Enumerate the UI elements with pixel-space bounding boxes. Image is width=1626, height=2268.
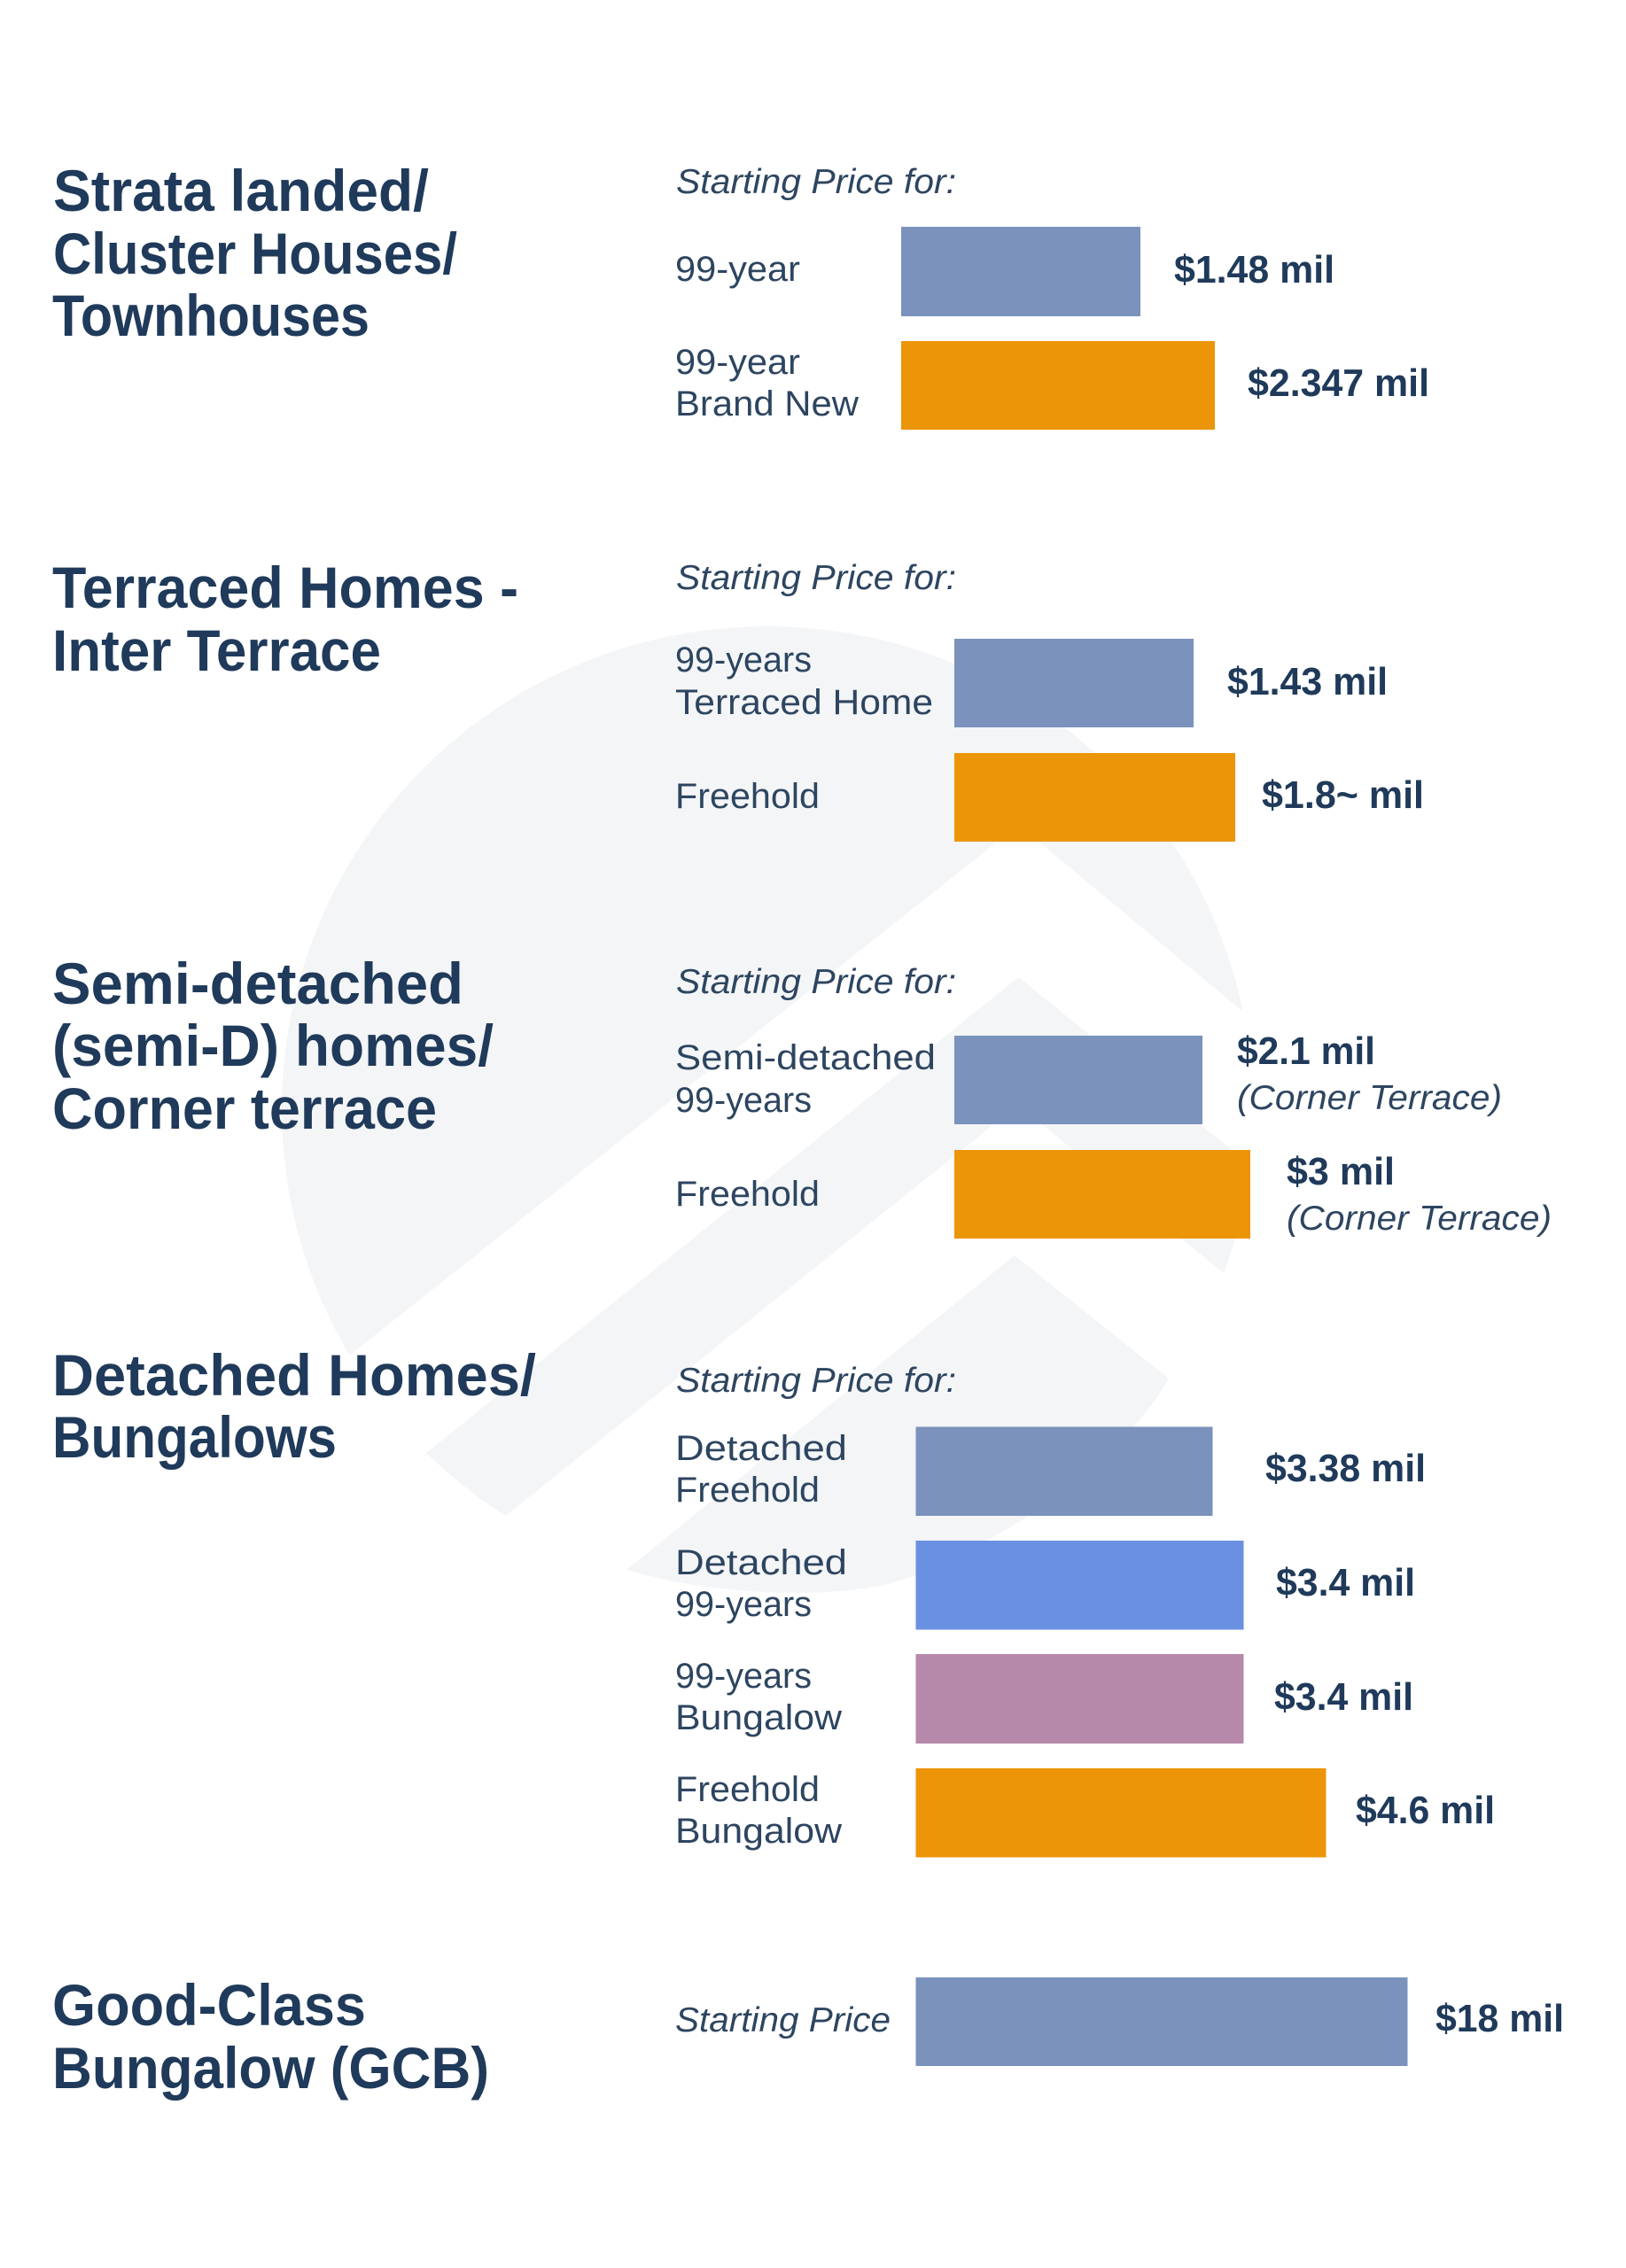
value: 1.8 mil: $1.8~ mil bbox=[1262, 773, 1424, 817]
label: freehold: Freehold bbox=[675, 1175, 820, 1214]
heading: detached homes: Bungalows bbox=[52, 1404, 337, 1470]
heading: strata landed: Strata landed/ bbox=[53, 158, 429, 223]
value: 3 mil corner terrace: $3 mil bbox=[1287, 1150, 1395, 1193]
label: freehold bungalow: Bungalow bbox=[675, 1812, 842, 1851]
bar: detached 99-years bbox=[916, 1541, 1244, 1630]
value: 3.4 mil: $3.4 mil bbox=[1276, 1561, 1415, 1604]
label: freehold: Freehold bbox=[675, 777, 820, 816]
heading: semi-detached: Corner terrace bbox=[52, 1076, 437, 1141]
value: 1.43 mil: $1.43 mil bbox=[1227, 660, 1388, 703]
value: 18 mil: $18 mil bbox=[1435, 1997, 1564, 2040]
heading: strata landed: Cluster Houses/ bbox=[53, 221, 457, 286]
label: 99-years bungalow: 99-years bbox=[675, 1657, 812, 1696]
label: 99-years bungalow: Bungalow bbox=[675, 1698, 842, 1737]
heading: terraced homes: Inter Terrace bbox=[52, 617, 381, 683]
background logo watermark bbox=[282, 626, 1242, 1593]
value: 2.1 mil corner terrace bbox=[1237, 1029, 1502, 1117]
heading: terraced homes bbox=[52, 555, 518, 683]
bar: 99-years bungalow bbox=[916, 1654, 1244, 1744]
subheading: starting price: Starting Price for: bbox=[676, 1362, 956, 1400]
heading: semi-detached: (semi-D) homes/ bbox=[52, 1013, 494, 1078]
bar: 99-year bbox=[901, 227, 1140, 316]
panel: terraced homes bbox=[52, 555, 1424, 842]
value: 3.38 mil: $3.38 mil bbox=[1265, 1447, 1426, 1490]
label: detached freehold: Freehold bbox=[675, 1471, 820, 1510]
value: 1.48 mil: $1.48 mil bbox=[1174, 248, 1334, 291]
heading: terraced homes: Terraced Homes - bbox=[52, 555, 518, 620]
subheading: starting price: Starting Price for: bbox=[676, 963, 956, 1001]
label: 99-year: 99-year bbox=[675, 250, 800, 289]
bar: detached freehold bbox=[916, 1426, 1212, 1516]
heading: semi-detached: Semi-detached bbox=[52, 951, 463, 1016]
label: 99-year brand new bbox=[675, 343, 859, 423]
label: detached freehold: Detached bbox=[675, 1429, 847, 1468]
value: 3 mil corner terrace bbox=[1287, 1150, 1552, 1238]
label: freehold bungalow bbox=[675, 1770, 842, 1851]
panel: good-class bungalow bbox=[52, 1972, 1564, 2101]
value: 3.4 mil: $3.4 mil bbox=[1274, 1675, 1413, 1719]
value: 2.347 mil: $2.347 mil bbox=[1248, 361, 1429, 405]
heading: semi-detached bbox=[52, 951, 494, 1141]
label: detached freehold bbox=[675, 1429, 847, 1510]
heading: strata landed bbox=[52, 158, 457, 348]
value: 2.1 mil corner terrace: (Corner Terrace) bbox=[1237, 1079, 1502, 1117]
value: 2.1 mil corner terrace: $2.1 mil bbox=[1237, 1029, 1375, 1073]
bar: freehold bbox=[954, 753, 1235, 842]
label: 99-years bungalow bbox=[675, 1657, 842, 1737]
bar: good-class bungalow bbox=[916, 1977, 1407, 2066]
value: 3 mil corner terrace: (Corner Terrace) bbox=[1287, 1200, 1552, 1238]
label: 99-years terraced home: 99-years bbox=[675, 641, 812, 680]
label: 99-years terraced home bbox=[675, 641, 933, 722]
label: detached 99-years: Detached bbox=[675, 1543, 847, 1582]
label: semi-detached 99-years: 99-years bbox=[675, 1081, 812, 1120]
label: 99-years terraced home: Terraced Home bbox=[675, 683, 933, 722]
heading: detached homes bbox=[52, 1342, 536, 1470]
heading: good-class bungalow: Bungalow (GCB) bbox=[52, 2035, 489, 2101]
panel: detached homes bbox=[52, 1342, 1495, 1857]
bar: freehold bbox=[954, 1150, 1250, 1239]
label: freehold bungalow: Freehold bbox=[675, 1770, 820, 1809]
bar: 99-years terraced home bbox=[954, 639, 1194, 727]
panel: strata landed bbox=[52, 158, 1429, 430]
panel: semi-detached bbox=[52, 951, 1552, 1239]
subheading: starting price: Starting Price for: bbox=[676, 163, 956, 201]
bar: freehold bungalow bbox=[916, 1768, 1326, 1857]
bar: semi-detached 99-years bbox=[954, 1036, 1202, 1124]
label: detached 99-years: 99-years bbox=[675, 1585, 812, 1624]
label: 99-year brand new: Brand New bbox=[675, 384, 859, 423]
bar: 99-year brand new bbox=[901, 341, 1215, 430]
subheading: starting price: Starting Price for: bbox=[676, 559, 956, 597]
label: starting price: Starting Price bbox=[675, 2001, 891, 2039]
heading: strata landed: Townhouses bbox=[52, 283, 370, 348]
heading: good-class bungalow: Good-Class bbox=[52, 1972, 366, 2038]
label: detached 99-years bbox=[675, 1543, 847, 1624]
label: 99-year brand new: 99-year bbox=[675, 343, 800, 382]
heading: good-class bungalow bbox=[52, 1972, 489, 2101]
value: 4.6 mil: $4.6 mil bbox=[1356, 1789, 1495, 1832]
label: semi-detached 99-years: Semi-detached bbox=[675, 1038, 936, 1077]
label: semi-detached 99-years bbox=[675, 1038, 936, 1120]
heading: detached homes: Detached Homes/ bbox=[52, 1342, 536, 1408]
